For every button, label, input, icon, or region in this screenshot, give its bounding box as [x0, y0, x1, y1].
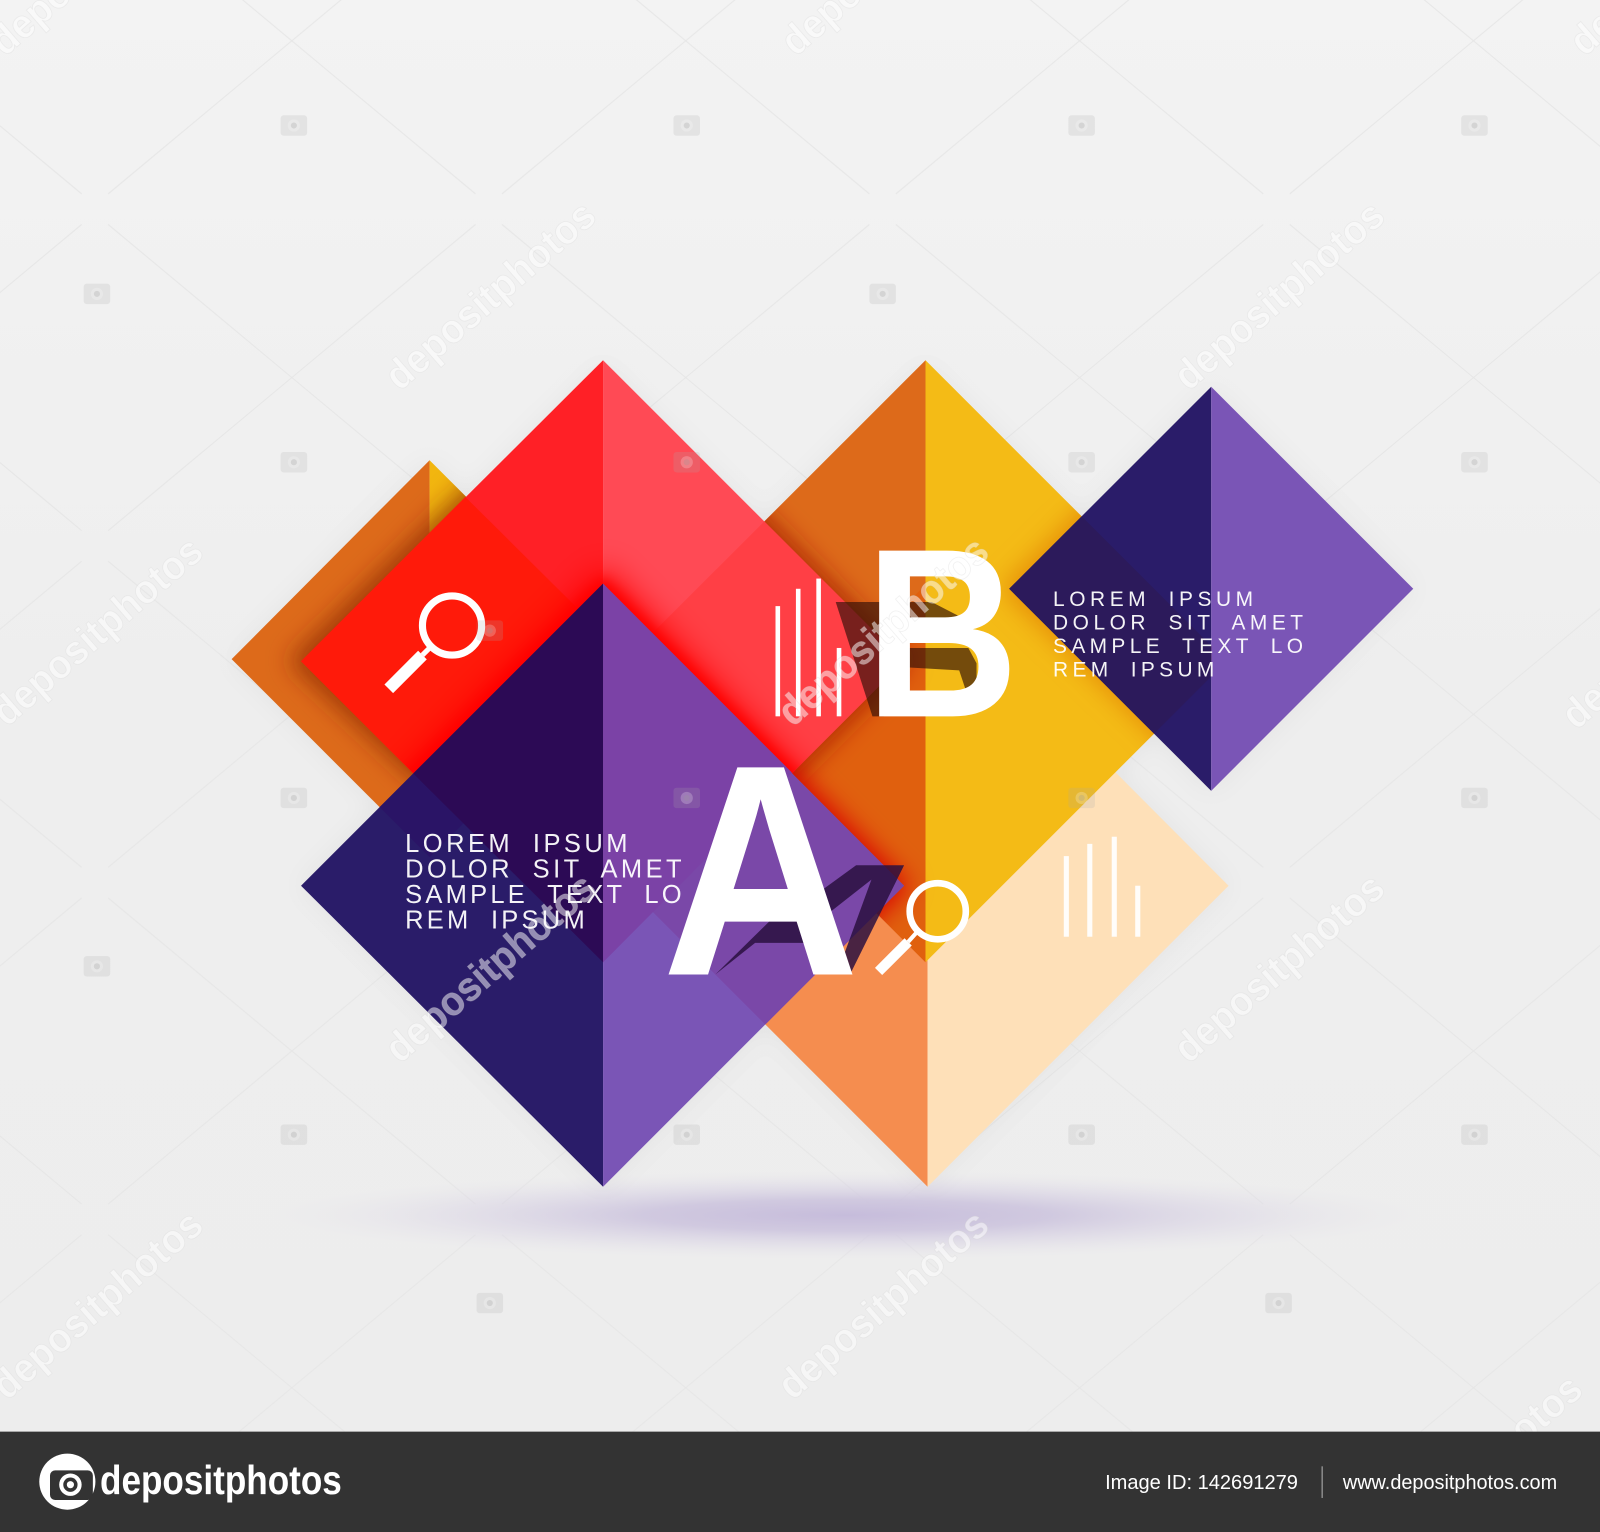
text block: violet diamond	[1053, 588, 1303, 682]
text block: purple diamond	[405, 830, 682, 935]
text block: purple diamond: REM IPSUM	[405, 907, 585, 935]
letter B with long shadow: B	[865, 499, 1019, 768]
logo wordmark: depositphotos	[100, 1457, 342, 1503]
logo: camera badge	[39, 1454, 95, 1510]
diamond: yellow	[624, 360, 1227, 962]
watermark text: depositphotos	[376, 191, 604, 399]
watermark camera icons	[84, 115, 1488, 1313]
shadows on yellow diamond	[296, 350, 1413, 1187]
icon: magnifier on orange	[879, 883, 966, 971]
floor shadow	[265, 1170, 1429, 1260]
diamond: small violet	[1009, 387, 1413, 791]
website: www.depositphotos.com	[1342, 1472, 1557, 1494]
shadow of red on small orange	[282, 480, 466, 786]
letter A with long shadow: A	[662, 701, 860, 1038]
icon: bars on light diamond	[1064, 837, 1140, 937]
text block: purple diamond: SAMPLE TEXT LO	[405, 881, 682, 909]
text block: violet diamond: LOREM IPSUM	[1053, 588, 1253, 611]
shadow of purple on red	[402, 556, 810, 773]
diamond: small orange back	[232, 460, 629, 857]
text block: violet diamond: REM IPSUM	[1053, 659, 1214, 682]
diamond: large purple	[301, 584, 904, 1187]
diamond: red	[301, 360, 904, 962]
soft shadows behind diamonds	[232, 360, 1413, 1187]
image id: Image ID: 142691279	[1105, 1472, 1298, 1494]
icon: bars on red diamond	[776, 579, 841, 716]
diamond: light peach	[627, 584, 1229, 1187]
watermark text: depositphotos	[768, 527, 997, 735]
icon: magnifier on red	[389, 596, 482, 689]
watermark text: depositphotos	[1164, 864, 1393, 1071]
footer divider	[1321, 1466, 1323, 1498]
watermark text: depositphotos	[376, 864, 604, 1071]
watermark text: depositphotos	[1164, 191, 1393, 399]
text block: violet diamond: SAMPLE TEXT LO	[1053, 635, 1303, 658]
text block: purple diamond: LOREM IPSUM	[405, 830, 628, 858]
watermark text: depositphotos	[768, 1201, 997, 1408]
footer bar	[0, 1432, 1600, 1532]
text block: purple diamond: DOLOR SIT AMET	[405, 856, 682, 884]
text block: violet diamond: DOLOR SIT AMET	[1053, 612, 1303, 635]
